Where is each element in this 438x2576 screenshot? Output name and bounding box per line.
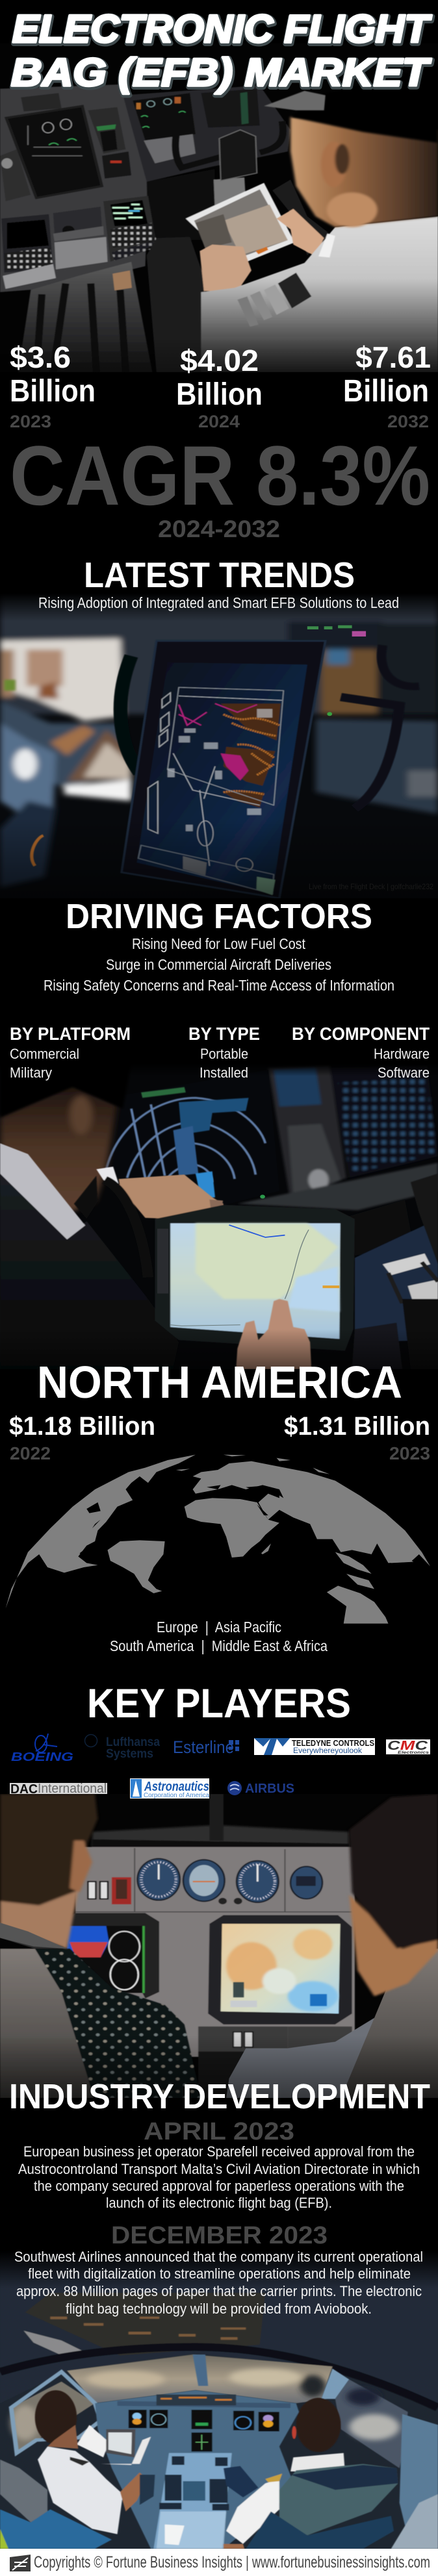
paragraph: April 2023 development — [18, 2143, 420, 2211]
paragraph: December 2023 development: fleet with digitalization to streamline operations and help eliminate — [28, 2266, 411, 2282]
stat: 2032 market size — [343, 340, 431, 431]
stat: north america 2022 — [9, 1412, 155, 1463]
logo: CMC Electronics: C M C — [387, 1739, 428, 1753]
stat: 2032 market size: 2032 — [387, 412, 429, 431]
list: driving factors: Rising Safety Concerns and Real-Time Access of Information — [44, 977, 394, 994]
stat: north america 2022: 2022 — [10, 1443, 51, 1463]
stat: 2032 market size: Billion — [343, 374, 429, 409]
icon: Fortune Business Insights logo — [10, 2555, 31, 2571]
title: ELECTRONIC FLIGHT — [13, 8, 432, 52]
heading: north america: NORTH AMERICA — [37, 1357, 402, 1408]
logo: DAC International — [10, 1782, 107, 1797]
logo: DAC International: DAC — [10, 1782, 38, 1797]
paragraph: April 2023 development: the company secured approval for paperless operations with the — [34, 2178, 404, 2194]
stat: 2024 market size — [176, 344, 263, 431]
stat: 2023 market size: Billion — [10, 374, 96, 409]
paragraph: April 2023 development: launch of its electronic flight bag (EFB). — [106, 2195, 332, 2211]
title: ELECTRONIC FLIGHT — [12, 7, 432, 51]
footer bar — [0, 2549, 438, 2576]
list: driving factors — [44, 935, 394, 994]
logo: Lufthansa Systems — [84, 1734, 160, 1761]
stat: 2023 market size: $3.6 — [10, 340, 71, 374]
photo: cockpit tablet with approach chart — [0, 597, 438, 898]
segment: by type: Portable — [200, 1046, 248, 1062]
stat: north america 2023: $1.31 Billion — [284, 1412, 430, 1441]
stat: north america 2023 — [284, 1412, 430, 1463]
segment: by type: BY TYPE — [188, 1024, 260, 1044]
logo: Teledyne Controls: Everywhereyoulook — [293, 1746, 363, 1755]
CAGR period: 2024-2032 — [158, 516, 280, 542]
stat: 2023 market size — [10, 340, 96, 431]
paragraph: December 2023 development: flight bag technology will be provided from Aviobook. — [66, 2301, 372, 2317]
heading: driving factors: DRIVING FACTORS — [66, 897, 372, 936]
segment: by component: Software — [378, 1065, 430, 1081]
logo: Teledyne Controls — [254, 1738, 375, 1755]
photo: pilot using tablet in cockpit — [0, 84, 438, 372]
segment: by component: BY COMPONENT — [292, 1024, 430, 1044]
segment: by platform — [10, 1024, 131, 1081]
photo: pilot hand on map tablet — [0, 1067, 438, 1369]
segment: by component — [292, 1024, 430, 1081]
stat: 2032 market size: $7.61 — [355, 340, 431, 374]
segment: by platform: BY PLATFORM — [10, 1024, 131, 1044]
logo: Astronautics: Astronautics — [144, 1780, 209, 1794]
stat: 2024 market size: 2024 — [198, 412, 240, 431]
logo: Airbus: AIRBUS — [245, 1782, 294, 1796]
segment: by platform: Commercial — [10, 1046, 79, 1062]
list: driving factors: Surge in Commercial Aircraft Deliveries — [106, 956, 331, 973]
logo: Astronautics: Corporation of America — [144, 1791, 209, 1799]
list: other regions — [110, 1619, 328, 1654]
stat: north america 2023: 2023 — [389, 1443, 430, 1463]
logo: DAC International: International — [38, 1782, 107, 1796]
logo: Esterline: Esterline — [173, 1737, 234, 1757]
logo: Astronautics — [130, 1778, 209, 1799]
logo: Lufthansa Systems: Systems — [106, 1747, 153, 1761]
paragraph: December 2023 development — [14, 2249, 423, 2317]
segment: by type: Installed — [200, 1065, 248, 1081]
logo: CMC Electronics: Electronics — [398, 1750, 430, 1755]
stat: 2024 market size: $4.02 — [180, 344, 259, 377]
logo: Teledyne Controls: TELEDYNE CONTROLS — [292, 1738, 374, 1748]
stat: 2023 market size: 2023 — [10, 412, 51, 431]
logo: Boeing — [11, 1734, 73, 1763]
list: other regions: Europe | Asia Pacific — [157, 1619, 281, 1635]
segment: by platform: Military — [10, 1065, 52, 1081]
photo: pilots in light aircraft glass cockpit — [0, 1794, 438, 2098]
photo: airliner flight deck with two pilots — [0, 2256, 438, 2549]
heading: key players: KEY PLAYERS — [87, 1681, 351, 1726]
logo: Boeing: BOEING — [11, 1750, 73, 1763]
segment: by component: Hardware — [374, 1046, 430, 1062]
segment: by type — [188, 1024, 260, 1081]
development date: April 2023: APRIL 2023 — [144, 2118, 294, 2145]
world map globe — [5, 1455, 430, 1624]
development date: December 2023: DECEMBER 2023 — [111, 2222, 328, 2249]
heading: latest trends: LATEST TRENDS — [84, 555, 355, 595]
stat: north america 2022: $1.18 Billion — [9, 1412, 155, 1441]
stat: 2024 market size: Billion — [176, 377, 263, 412]
list: driving factors: Rising Need for Low Fuel Cost — [132, 935, 306, 952]
title — [11, 7, 432, 95]
logo: Lufthansa Systems: Lufthansa — [106, 1736, 160, 1749]
title: BAG (EFB) MARKET — [11, 51, 432, 94]
list: other regions: South America | Middle East & Africa — [110, 1637, 328, 1654]
title: BAG (EFB) MARKET — [12, 52, 432, 95]
